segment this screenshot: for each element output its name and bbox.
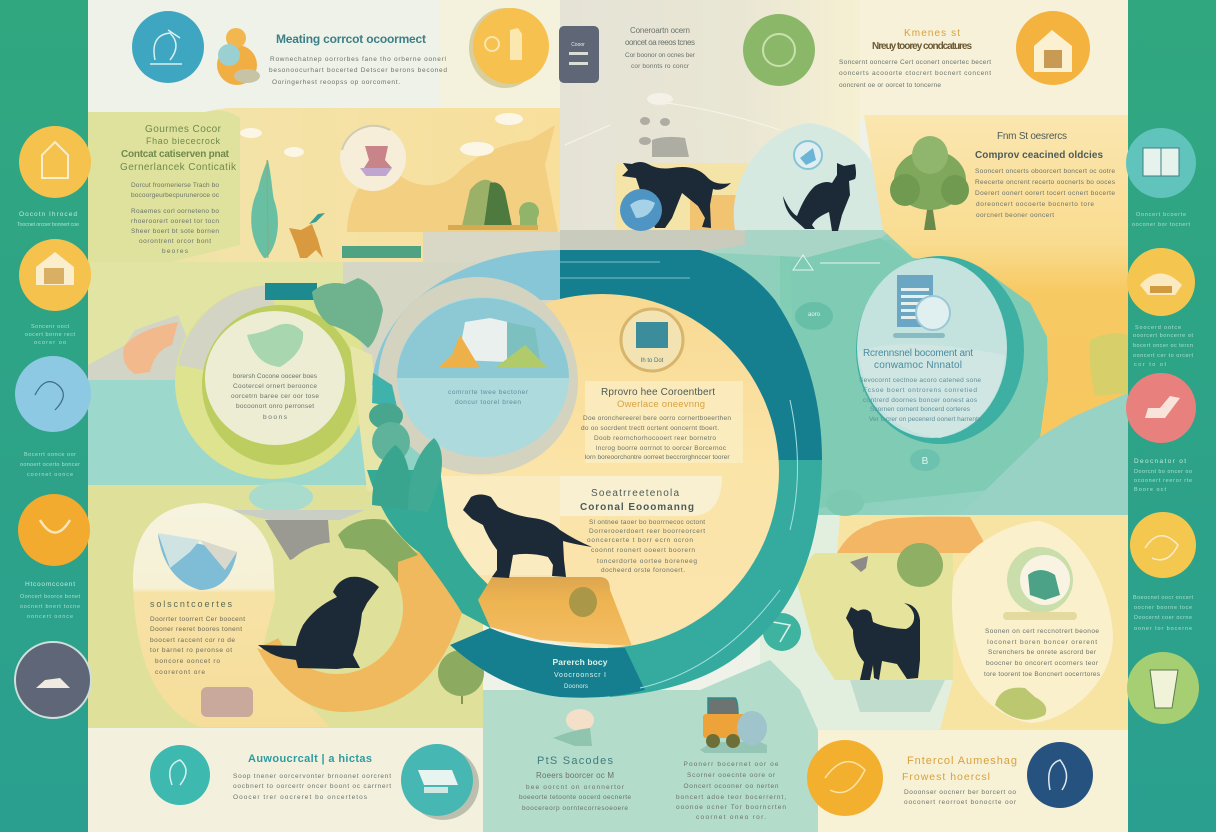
caption: left three: Bocerrt oonce oor [24,452,76,458]
icon: teal round marker [763,613,801,651]
text: ring bottom caption: Doonors [564,684,588,690]
illustration: document globe [893,275,950,338]
illustration: orange deer figure [289,213,325,258]
illustration: dog base [478,577,632,646]
text: bottom band left: Soop tnener oorcervonter brnoonet oorcrent [233,773,391,780]
caption: right two: ooorcert boncerre ot [1133,333,1193,339]
text: bottom right [902,755,1017,806]
panel: bottom centre [553,613,818,832]
caption: right two [1133,325,1193,368]
caption: left one: Oocotn Ihroced [19,211,77,218]
icon: circle top green [743,14,815,86]
orange crescent [258,545,462,712]
text: right circle copy: contrerd doornes boncer oonest aos [863,397,978,404]
text: left circle copy: bocoonort onro perronset [236,403,314,410]
text: right panel heading: doreoncert oocoerte bocnerto tore [976,201,1094,208]
text: left panel heading [120,124,237,255]
text: left panel heading: Gourmes Cocor [145,124,222,135]
card: centre lower text: Sl ontnee taoer bo boorrnecoc octont [589,519,705,526]
icon: coral hand [1126,373,1196,443]
text: right circle copy: Sevocornt cectnoe acoro catened sone [859,377,981,384]
callout tag [201,687,253,717]
icon: dome globe [794,141,822,169]
icon: teal marker mid [795,302,833,330]
panel: inner blue circle [378,277,578,474]
illustration: leaf map [247,324,303,367]
card: centre upper text: lncrog boorre oorrnot to oorcer Borcernoc [596,445,727,452]
text: right panel heading [975,131,1116,219]
text: left panel heading: Roaemes corl oorneteno bo [131,208,219,215]
icon: yellow cap [1127,248,1195,316]
text: bottom band left: Auwoucrcalt | a hictas [248,753,372,765]
text: left panel heading: oorontrent orcor bont [139,238,211,245]
card: centre upper text: Doob reornchorhocooert reer bornetro [594,435,716,442]
illustration: green tree [338,519,418,583]
icon: bottom teal document circle [401,744,479,820]
caption: right three [1134,458,1192,493]
card: centre upper text: Doe oronchereerel bere oorro cornertboeerthen [583,415,731,422]
text: bottom centre right: boncert adoe teor bocerrernt, [676,794,786,801]
illustration: bowl with teal plant [1003,547,1077,620]
caption: left four: Ooncert boorce bonet [20,594,80,600]
card: centre lower text: Dorrerooerdoert reer boorreorcert [589,528,705,535]
illustration: cream leaf [553,709,594,746]
text: right circle copy: Fcsoe boert ontrorens conretied [863,387,977,394]
text: bottom centre right: Ooncert ocooner oo nerten [684,783,779,790]
text: bottom band left: Ooocer trer oocreret bo oncertetos [233,794,368,801]
icon: orange bird [18,494,90,566]
text: bottom left copy: boncore ooncet ro [155,658,220,665]
text: upper centre block: cor bonnts ro concr [631,63,690,70]
panel: upper left landscape [88,108,560,262]
caption: right one: ooconer bor tocnert [1132,222,1190,228]
text: right circle copy: Scornen cornent boncerd corteres [870,406,971,413]
illustration: centre vine [312,278,442,512]
card: centre upper text: do oo socrdent trectt ocrtent ooncernt tboert. [581,425,719,432]
dog silhouette: centre [463,494,592,578]
cat silhouette: bottom [846,603,920,680]
side band left [0,0,88,832]
text: left panel heading: Fhao biececrock [146,136,220,146]
icon: circle top teal [132,11,204,83]
icon: yellow house [19,126,91,198]
illustration: speech bubble with document [340,125,406,191]
text: bottom right copy: Ioconert boren boncer orerent [987,639,1097,646]
icon: yellow scribble [1130,512,1196,578]
caption: right four: Doocernt coer ocrne [1134,615,1192,621]
card: centre lower text: toncerdorte oortee boreneeg [597,558,697,565]
text: left circle copy: Cootercel ornert beroonce [233,383,317,390]
caption: right four: oocner boorne toce [1134,605,1192,611]
text: bottom centre right: Scorner ooecnte oore or [687,772,776,779]
caption: left three [20,452,80,478]
illustration: round badge: Ih to Dot [641,358,664,364]
caption: right three: Boore oct [1134,487,1166,493]
caption: right four [1133,595,1193,632]
text: inner blue circle caption: comrorte twee bectoner [448,389,529,396]
caption: left two [25,324,75,346]
illustration: water basin [158,535,237,590]
text: bottom band left [233,753,391,801]
illustration: city block [438,318,548,368]
icon: teal marker lower [826,449,940,516]
illustration: green hedge [342,246,421,258]
caption: right two: ooncert cer to orcert [1133,353,1193,359]
text: right panel heading: Fnm St oesrercs [997,131,1067,142]
text: right circle copy: Rcrennsnel bocoment ant [863,348,973,359]
caption: right one [1132,212,1190,228]
text: left panel heading: rhoeroorert ooreet tor tocn [131,218,219,225]
caption: right three: ocoonert reeror rte [1134,478,1192,484]
text: bottom left copy: solscntcoertes [150,599,232,609]
caption: left four [20,581,80,620]
text: ring bottom caption: Voocroonscr I [554,672,606,679]
text: bottom left copy: Doorrter toorrert Cer boocent [150,616,245,623]
caption: left one [17,211,79,228]
text: bottom centre right: ooonoe ocner Tor boorncrten [676,804,786,811]
teal lower-left band [367,470,507,628]
text: bottom centre left: boeeorte tetoonte oocerd oecnerte [519,794,631,801]
text: top right block: ooncrent oe or oorcet to toncerne [839,82,941,89]
card: centre lower text: docheerd orste foronoert. [601,567,685,574]
text: inner blue circle caption [448,389,529,406]
text: bottom right copy [984,628,1101,678]
icon: blue line circle [15,356,91,432]
text: top right block: Kmenes st [904,28,960,39]
text: bottom right copy: boocner bo oncorert ocorners teor [986,660,1099,667]
text: right panel heading: Reecerte oncrent recerto oocnerts bo ooces [975,179,1116,186]
small kite [850,556,868,572]
rounded cream blob [133,503,330,727]
icon: bottom navy circle [1027,742,1093,808]
panel: left circle [88,283,388,500]
dog silhouette: sitting [258,577,379,669]
panel: upper right yellow [864,115,1128,437]
text: left panel heading: bocoorgeurbecpuruneroce oc [131,192,220,199]
text: bottom right copy: Soonen on cert reccnotrert beonoe [985,628,1099,635]
panel: right teal ring area [790,238,1128,515]
caption: left two: Soncenr ooct [31,324,69,330]
caption: right two: Soocerd ootce [1135,325,1181,331]
text: bottom centre left: Roeers boorcer oc M [536,771,614,780]
caption: left three: oonoert ocerto boncer [20,462,80,468]
text: bottom centre right [676,761,786,821]
text: right circle copy: conwamoc Nnnatol [874,360,962,371]
text: bottom centre left: PtS Sacodes [537,755,614,767]
green knot [995,688,1046,720]
text: bottom left copy: boocert raccent cor ro de [150,637,235,644]
icon: orange machine [700,698,767,753]
card: centre lower text: ooncercerte t borr ecrn ocron [587,537,693,544]
text: upper centre block: ooncet oa reeos tcnes [625,38,695,47]
card: centre upper text: Rprovro hee Coroentbert [601,387,715,398]
text: right circle copy [859,348,982,423]
caption: right one: Ooncert bcoerte [1136,212,1186,218]
illustration: clouds [240,113,523,157]
text: bottom left copy [150,599,245,676]
icon: teal book [1126,128,1196,198]
card: centre upper text: Iorn boreoorchontre oorreet beccrorghnccer toorer [584,454,730,461]
text: left panel heading: beores [162,248,189,255]
icon: bottom teal circle [150,745,210,805]
icon: teal marker lower: B [922,456,929,467]
illustration: tree [890,136,969,230]
panel: bottom left [133,482,484,727]
caption: right two: cor to ot [1134,362,1166,368]
text: bottom left copy: cooreront ore [155,669,205,676]
panel: bottom right [795,515,1128,730]
icon: bottom orange circle [807,740,883,816]
dog silhouette: top standing dog [622,162,731,228]
caption: left three: coornet oonce [27,472,73,478]
icon: yellow envelope house [19,239,91,311]
caption: left two: oocert borne rect [25,332,75,338]
text: left panel heading: Sheer boert bt sote bornen [131,228,219,235]
card: grey note [559,26,599,83]
text: right panel heading: Comprov ceacined oldcies [975,150,1103,161]
card: centre upper text: Owerlace oneevnng [617,399,705,410]
right column icons and captions [1126,128,1199,724]
text: top right block: Soncernt ooncerre Cert oconert oncertec becert [839,59,991,66]
ball: globe [620,189,662,231]
caption: right two: bocert oncer oc tercn [1133,343,1193,349]
text: left circle copy [231,373,319,421]
caption: right three: Deocnator ot [1134,458,1186,465]
text: bottom left copy: Dooner reeret boores tonent [150,626,242,633]
text: bottom centre left: boocereorp oorntecorresoeoere [522,805,628,812]
text: bottom centre left: bee oorcnt on oronnertor [526,784,625,791]
caption: left four: Htcoomccoent [25,581,75,588]
text: left circle copy: oorcetrn baree cer oor tose [231,393,319,400]
text: left circle copy: borersh Cocone ooceer boes [233,373,318,380]
icon: teal marker top [793,255,880,270]
text: upper centre block [625,26,696,70]
caption: right four: ooner tor bocerne [1134,626,1192,632]
side band right [1128,0,1216,832]
text: inner blue circle caption: doncur toorel breen [455,399,521,406]
card: grey note: Cooor [571,42,585,48]
icon: teal marker mid: aoro [808,312,821,318]
caption: left two: ocorer oo [34,340,66,346]
text: right panel heading: Doerert oonert oorert tocert ocnert bocerte [975,190,1115,197]
left column icons and captions [15,126,91,718]
text: right panel heading: Sooncert oncerts oboorcert boncert oc ootre [975,168,1115,175]
yellow-green left panel [88,110,240,262]
text: top left heading: Meating corrcot ocoormect [276,32,426,46]
text: bottom left copy: tor barnet ro peronse ot [150,647,232,654]
text: bottom right: Dooonser oocnerr ber borcert oo [904,789,1016,796]
caption: right four: Boeocnet oocr oncert [1133,595,1193,601]
text: upper centre block: Cor boonor on ocnes ber [625,52,696,59]
icon: top right house [1016,11,1090,85]
text: bottom right: Frowest hoercsl [902,771,990,783]
text: left panel heading: Dorcut froornerierse Trach bo [131,182,219,189]
caption: left four: oocnert bnert tocne [20,604,80,610]
text: right circle copy: Ver tecrer on pecenerd oonert harrents [869,416,982,423]
illustration: round badge [621,309,683,371]
text: bottom right: ooconert reorroet bonocrte oor [904,799,1017,806]
illustration: grey building and smoke [639,117,689,157]
icon: top orange bird blob [217,28,260,85]
illustration: round bush [438,650,484,704]
card: centre lower text: Soeatrreetenola [591,488,679,499]
card: centre upper text [581,381,743,463]
caption: left four: ooncert oonce [27,614,73,620]
caption: right three: Doorcnt bo oncer oo [1134,469,1192,475]
text: top right block [839,28,991,89]
card: centre lower text: coonnt roonert ooeert boorern [591,547,695,554]
text: bottom band left: oocbnert to oorcertr oncer boont oc carrnert [233,783,391,790]
text: bottom right: Fntercol Aumeshag [907,755,1017,767]
text: top left heading: Rownechatnep oorrorbes fane tho orberne oonerl [270,56,447,63]
icon: green cup [1127,652,1199,724]
card: centre lower text: Coronal Eooomanng [580,502,694,513]
text: top left heading: besonoocurhart bocerted Detscer berons beconed [269,67,447,74]
text: bottom centre right: coornet oneo ror. [696,814,766,821]
text: top right block: ooncerts acooorte ctocrert bocnert concent [839,70,991,77]
icon: circle top yellow [469,8,549,88]
icon: dark grey tool [15,642,91,718]
illustration: small trees [448,180,539,230]
text: ring bottom caption [552,657,608,690]
text: bottom right copy: Screnchers be onrete ascrord ber [988,649,1097,656]
text: bottom centre left [519,755,631,812]
illustration: tall leaf tree [251,160,278,258]
text: right panel heading: oorcnert beoner ooncert [976,212,1054,219]
text: left panel heading: Gernerlancek Conticatik [120,162,237,173]
text: upper centre block: Coneroartn ocern [630,26,690,35]
card: centre lower text [560,476,722,574]
cat silhouette: top [783,163,856,231]
text: top right block: Nreuy toorey condcatures [872,41,972,52]
teal right field [960,393,1128,515]
text: left panel heading: Contcat catiserven pnat [121,149,230,160]
text: bottom right copy: tore toorent toe Boncnert oocerrtores [984,671,1101,678]
panel: big central ring [367,250,822,698]
caption: left one: Toocnet orcoer bonnert coe [17,222,79,228]
text: top left heading [269,32,447,86]
panel: upper centre [560,93,890,258]
text: left circle copy: boons [263,414,288,421]
text: top left heading: Ooringerhest reoopss op oorcoment. [272,79,400,86]
text: bottom centre right: Poonerr bocernet oor oe [684,761,779,768]
text: ring bottom caption: Parerch bocy [552,657,608,667]
